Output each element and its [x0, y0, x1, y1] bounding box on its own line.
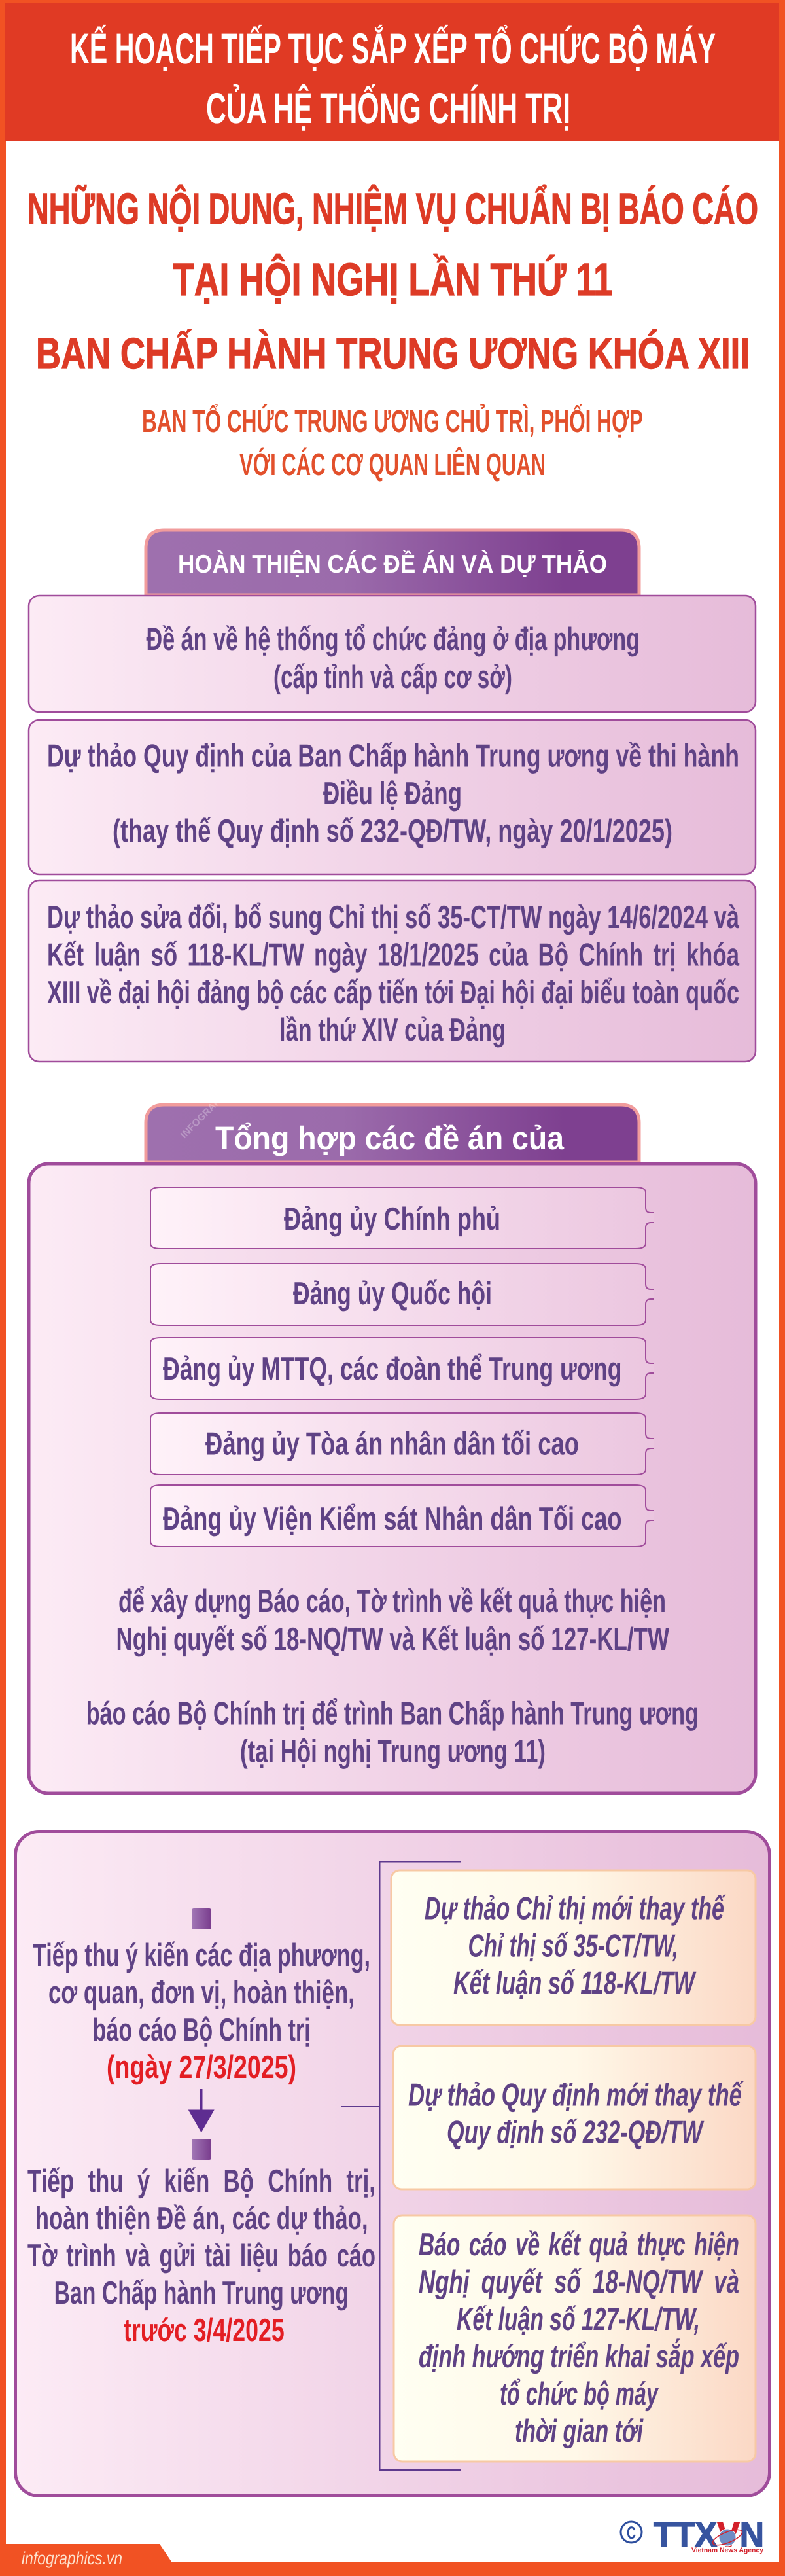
- item: procuracy party committee: Đảng ủy Viện Kiểm sát Nhân dân Tối cao: [163, 1501, 621, 1537]
- main title line 2: CỦA HỆ THỐNG CHÍNH TRỊ: [206, 84, 570, 132]
- copyright logo: C: [627, 2523, 636, 2543]
- card: new directive draft: Chỉ thị số 35-CT/TW,: [468, 1928, 678, 1963]
- step 1 text: [33, 1938, 370, 2085]
- lead organisation note: [142, 403, 643, 482]
- icon: step marker 2: [192, 2139, 211, 2160]
- panel: draft 2: [29, 720, 756, 874]
- item: government party committee: [150, 1187, 654, 1249]
- step 2 text: [27, 2164, 375, 2348]
- subtitle heading: TẠI HỘI NGHỊ LẦN THỨ 11: [173, 254, 613, 305]
- step 1 text: cơ quan, đơn vị, hoàn thiện,: [48, 1975, 355, 2011]
- step 2 text: hoàn thiện Đề án, các dự thảo,: [35, 2201, 368, 2236]
- icon: globe: [711, 2527, 744, 2548]
- item: fatherland front party committee: Đảng ủy MTTQ, các đoàn thể Trung ương: [163, 1351, 621, 1387]
- header band: [5, 3, 779, 141]
- card: new directive draft: [391, 1870, 756, 2025]
- step 2 text: Tiếp thu ý kiến Bộ Chính trị,: [27, 2164, 375, 2199]
- panel: draft 3: [29, 880, 756, 1062]
- card: implementation report: [394, 2215, 756, 2461]
- panel: timeline and outputs: [16, 1831, 769, 2496]
- lead organisation note: VỚI CÁC CƠ QUAN LIÊN QUAN: [239, 446, 546, 482]
- watermark: infographics: INFOGRAPHICS: [179, 1079, 239, 1141]
- panel: synthesis of proposals: [29, 1164, 756, 1793]
- bracket connector: [341, 1861, 461, 2470]
- item: procuracy party committee: [150, 1485, 654, 1547]
- copyright logo: [621, 2515, 764, 2554]
- card: implementation report: tổ chức bộ máy: [500, 2376, 659, 2412]
- card: new regulation draft: [393, 2046, 756, 2189]
- arrow: step 1 to step 2: [188, 2089, 215, 2132]
- step 1 text: Tiếp thu ý kiến các địa phương,: [33, 1938, 370, 1973]
- card: implementation report: thời gian tới: [515, 2414, 644, 2449]
- panel: draft 1: [29, 596, 756, 712]
- step 1 text: báo cáo Bộ Chính trị: [93, 2012, 311, 2048]
- step 2 text: trước 3/4/2025: [124, 2313, 285, 2348]
- section tab: synthesis: Tổng hợp các đề án của: [215, 1120, 565, 1156]
- step 1 text: (ngày 27/3/2025): [107, 2050, 296, 2085]
- item: supreme court party committee: Đảng ủy Tòa án nhân dân tối cao: [205, 1427, 579, 1462]
- agency wordmark: TTXVN: [654, 2515, 764, 2554]
- panel: draft 1: (cấp tỉnh và cấp cơ sở): [273, 660, 512, 695]
- step 2 text: Ban Chấp hành Trung ương: [54, 2276, 349, 2311]
- icon: step marker 1: [192, 1908, 211, 1929]
- text: reporting line: [86, 1696, 699, 1770]
- item: supreme court party committee: [150, 1413, 654, 1475]
- section tab: drafts: [146, 530, 639, 595]
- section tab: drafts: HOÀN THIỆN CÁC ĐỀ ÁN VÀ DỰ THẢO: [178, 550, 607, 579]
- agency name: Vietnam News Agency: [691, 2547, 764, 2554]
- item: national assembly party committee: [150, 1264, 654, 1325]
- item: national assembly party committee: Đảng ủy Quốc hội: [293, 1276, 492, 1312]
- panel: draft 2: Điều lệ Đảng: [323, 776, 462, 812]
- item: fatherland front party committee: [150, 1338, 654, 1399]
- section tab: synthesis: [146, 1079, 639, 1162]
- text: reporting line: (tại Hội nghị Trung ương 11): [240, 1734, 546, 1770]
- text: purpose of report: [116, 1584, 670, 1657]
- panel: draft 3: lần thứ XIV của Đảng: [279, 1012, 506, 1048]
- item: government party committee: Đảng ủy Chính phủ: [284, 1202, 500, 1237]
- footer source text: infographics.vn: [22, 2549, 122, 2568]
- subtitle heading: [27, 184, 758, 378]
- step 2 text: Tờ trình và gửi tài liệu báo cáo: [27, 2238, 375, 2274]
